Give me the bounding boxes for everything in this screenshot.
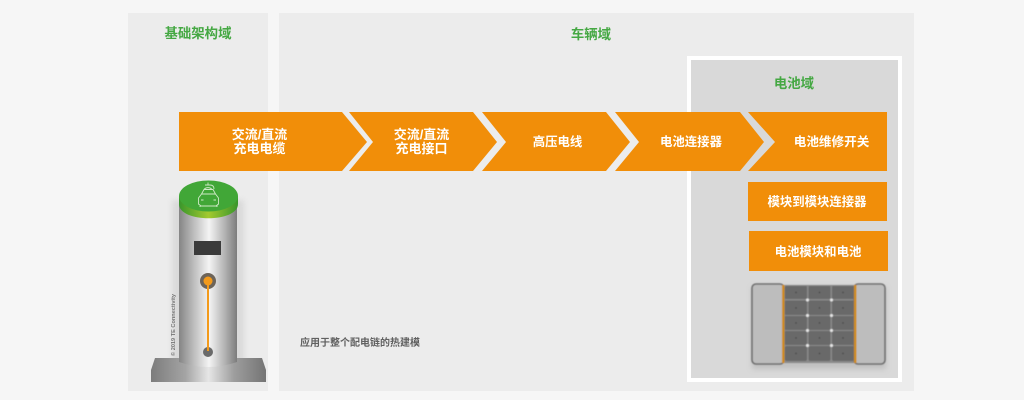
caption: thermal modeling: 应用于整个配电链的热建模 (300, 336, 420, 349)
charger socket and cable (200, 273, 216, 357)
arrow: high voltage wire: 高压电线 (533, 134, 583, 149)
panel: infrastructure domain (128, 13, 268, 391)
heading: infrastructure domain: 基础架构域 (165, 25, 232, 41)
arrow: battery connector: 电池连接器 (660, 134, 723, 149)
charger base (151, 358, 266, 382)
charger green cap (179, 180, 238, 218)
arrow: AC/DC charging port: 充电接口 (395, 141, 448, 156)
arrow: battery service disconnect: 电池维修开关 (794, 134, 870, 149)
arrow: AC/DC charging port: 交流/直流 (394, 127, 449, 142)
panel: vehicle domain (279, 13, 914, 391)
arrow: AC/DC charging cable: 充电电缆 (233, 141, 286, 156)
icon: battery pack (752, 284, 886, 369)
panel: battery domain (689, 58, 900, 380)
charger screen (194, 241, 221, 255)
arrow: high voltage wire (482, 112, 630, 171)
box: module to module connector: 模块到模块连接器 (767, 194, 867, 209)
copyright note: © 2019 TE Connectivity (170, 293, 177, 356)
charger column (179, 200, 237, 367)
arrow: AC/DC charging cable: 交流/直流 (232, 127, 287, 142)
arrow: AC/DC charging port (349, 112, 497, 171)
heading: battery domain: 电池域 (774, 75, 815, 91)
box: battery module and cell: 电池模块和电池 (775, 244, 862, 259)
heading: vehicle domain: 车辆域 (571, 26, 612, 42)
arrow: AC/DC charging cable (179, 112, 367, 171)
illustration: charging station (151, 180, 266, 382)
arrow: battery service disconnect (748, 112, 887, 171)
box: battery module and cell (749, 231, 888, 271)
arrow: battery connector (615, 112, 764, 171)
box: module to module connector (748, 182, 887, 221)
